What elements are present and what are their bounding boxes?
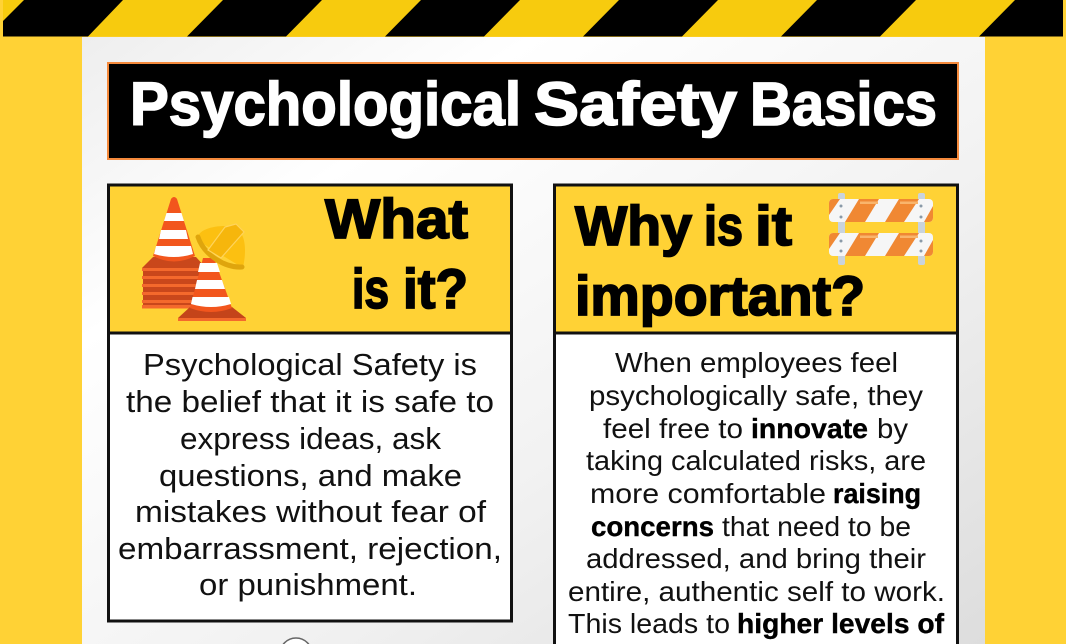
- text block: definition: express ideas, ask: [180, 421, 442, 456]
- text block: importance: taking calculated risks, are: [586, 445, 926, 476]
- text block: definition: Psychological Safety is: [143, 347, 477, 382]
- text block: definition: [118, 347, 502, 602]
- icon: traffic cones and hard hat: [142, 197, 246, 321]
- heading: why is it important: is: [704, 194, 743, 257]
- text block: importance: [568, 347, 945, 639]
- hazard stripe bar: [3, 0, 1063, 36]
- text block: importance: feel free to: [603, 413, 743, 444]
- header: why is it important: [554, 185, 958, 333]
- heading: what is it: What: [325, 187, 468, 250]
- heading: what is it: [325, 187, 468, 320]
- text block: definition: questions, and make: [159, 458, 462, 493]
- white content panel: [82, 37, 985, 644]
- title banner: Basics: [750, 70, 937, 138]
- text block: definition: or punishment.: [199, 567, 417, 602]
- text block: definition: embarrassment, rejection,: [118, 531, 502, 566]
- heading: why is it important: it: [755, 194, 792, 257]
- text block: importance: more comfortable: [590, 478, 826, 509]
- text block: importance: entire, authentic self to work.: [568, 576, 945, 607]
- icon: road barrier: [829, 193, 933, 265]
- heading: why is it important: important?: [575, 264, 865, 327]
- text block: importance: by: [877, 413, 908, 444]
- text block: definition: the belief that it is safe to: [126, 384, 494, 419]
- text block: importance: innovate: [751, 413, 868, 444]
- heading: why is it important: [575, 194, 865, 327]
- heading: why is it important: Why: [575, 194, 692, 257]
- icon: partial circle at bottom edge: [280, 638, 312, 644]
- text block: importance: concerns: [591, 511, 714, 542]
- text block: importance: addressed, and bring their: [586, 543, 926, 574]
- text block: importance: that need to be: [722, 511, 911, 542]
- panel: why is it important: [554, 185, 958, 644]
- title banner: [108, 63, 958, 159]
- text block: importance: This leads to: [568, 608, 730, 639]
- title banner: Psychological: [130, 70, 521, 138]
- text block: importance: higher levels of: [737, 608, 945, 639]
- title banner: Safety: [534, 70, 737, 138]
- header: what is it: [108, 185, 512, 333]
- heading: what is it: it?: [403, 257, 468, 320]
- text block: importance: When employees feel: [615, 347, 898, 378]
- panel: what is it: [108, 185, 512, 621]
- heading: what is it: is: [352, 257, 389, 320]
- text block: definition: mistakes without fear of: [135, 494, 486, 529]
- text block: importance: psychologically safe, they: [589, 380, 923, 411]
- text block: importance: raising: [833, 478, 921, 509]
